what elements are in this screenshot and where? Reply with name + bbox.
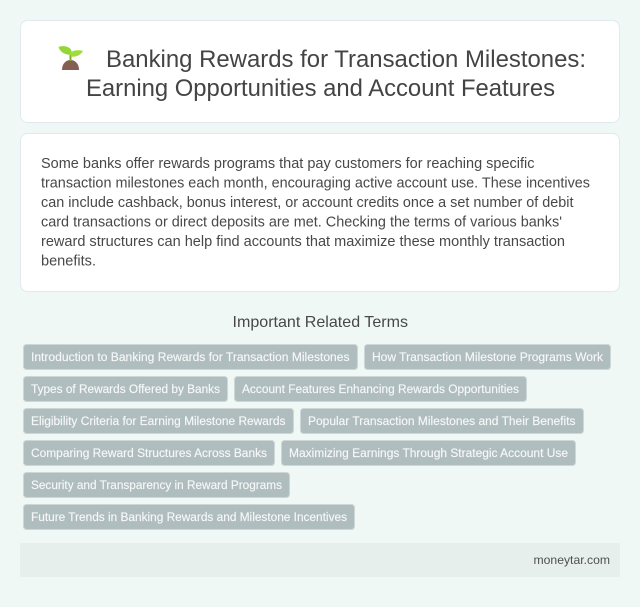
- heading: important related terms: Important Related Terms: [232, 314, 408, 331]
- tag: future trends: [24, 504, 354, 530]
- panel: description: [20, 134, 620, 292]
- title: [86, 46, 586, 102]
- tag: security: [24, 472, 290, 498]
- text block: description: [41, 156, 590, 270]
- icon: sprout: [58, 46, 83, 70]
- tag: eligibility: [24, 408, 294, 434]
- footer: site credit: moneytar.com: [534, 553, 610, 567]
- tag: how programs work: [364, 344, 610, 370]
- tag: introduction: Introduction to Banking Rewards for Transaction Milestones: [31, 350, 350, 364]
- tag: comparing structures: Comparing Reward Structures Across Banks: [31, 446, 267, 460]
- text block: description: transaction milestones each month, encouraging active account use. These incentives: [41, 176, 590, 192]
- tag: maximizing earnings: [282, 440, 576, 466]
- text block: description: reward structures can help find accounts that maximize these monthly transaction: [41, 234, 565, 250]
- text block: description: Some banks offer rewards programs that pay customers for reaching specific: [41, 156, 534, 172]
- tag: popular milestones: [300, 408, 584, 434]
- tag: popular milestones: Popular Transaction Milestones and Their Benefits: [308, 414, 576, 428]
- text block: description: benefits.: [41, 254, 96, 270]
- tag: types of rewards: Types of Rewards Offered by Banks: [31, 382, 220, 396]
- tag: security: Security and Transparency in Reward Programs: [31, 478, 282, 492]
- tag: account features: Account Features Enhancing Rewards Opportunities: [242, 382, 519, 396]
- tag: account features: [234, 376, 526, 402]
- tag: introduction: [24, 344, 358, 370]
- text block: description: can include cashback, bonus interest, or account credits once a set number of debit: [41, 195, 574, 211]
- tag: types of rewards: [24, 376, 228, 402]
- tag: maximizing earnings: Maximizing Earnings Through Strategic Account Use: [289, 446, 568, 460]
- panel: title card: [20, 20, 620, 122]
- tag: comparing structures: [24, 440, 274, 466]
- title: Banking Rewards for Transaction Milestones:: [106, 46, 586, 73]
- title: Earning Opportunities and Account Features: [86, 75, 555, 102]
- panel: related term tags: [24, 344, 610, 530]
- tag: eligibility: Eligibility Criteria for Earning Milestone Rewards: [31, 414, 286, 428]
- tag: how programs work: How Transaction Milestone Programs Work: [372, 350, 604, 364]
- tag: future trends: Future Trends in Banking Rewards and Milestone Incentives: [31, 510, 347, 524]
- text block: description: card transactions or direct deposits are met. Checking the terms of various banks': [41, 214, 562, 230]
- footer: [20, 543, 620, 577]
